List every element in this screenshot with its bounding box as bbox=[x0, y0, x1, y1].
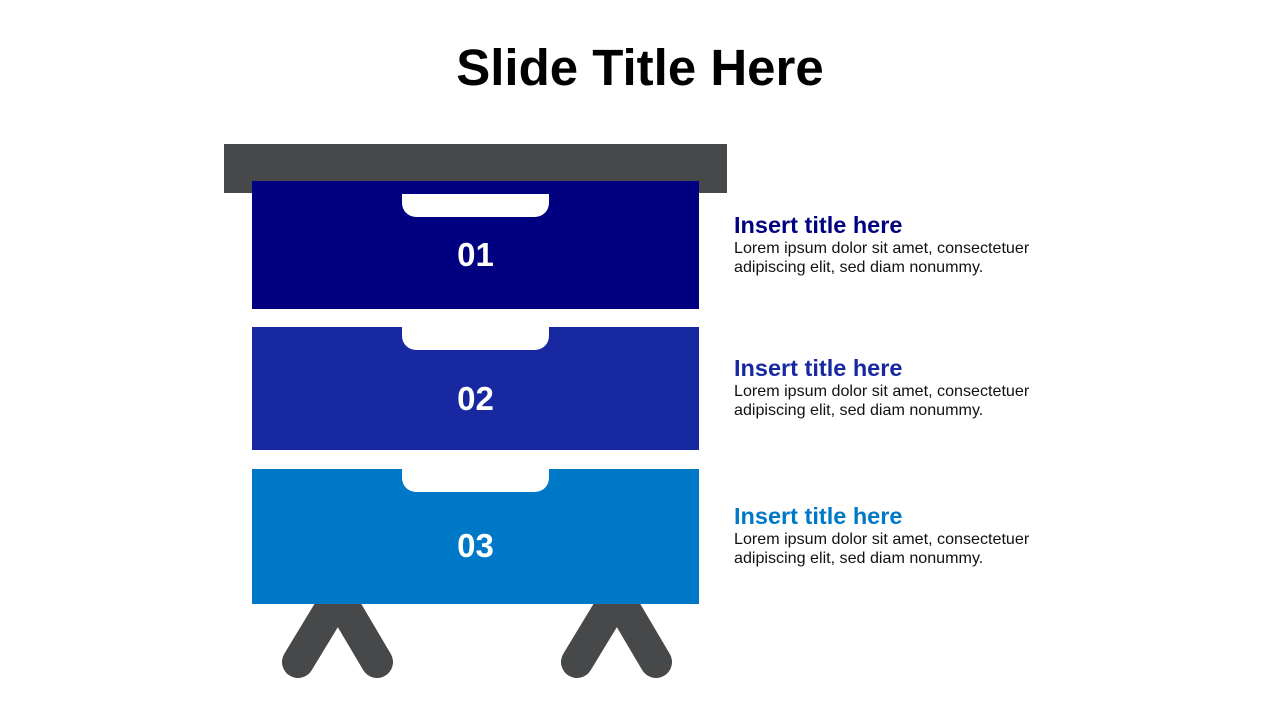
text 3: Lorem ipsum dolor sit amet, consectetuer bbox=[734, 530, 1029, 548]
drawer 03 bbox=[252, 469, 699, 604]
text 2 bbox=[734, 355, 1029, 419]
top bar bbox=[224, 144, 727, 193]
text 3 bbox=[734, 503, 1029, 567]
text 1 bbox=[734, 212, 1029, 276]
text 2: adipiscing elit, sed diam nonummy. bbox=[734, 401, 983, 419]
drawer 02 bbox=[252, 327, 699, 450]
text 3: Insert title here bbox=[734, 503, 902, 529]
drawer 02: 02 bbox=[457, 380, 494, 417]
drawer 01 bbox=[252, 181, 699, 309]
text 3: adipiscing elit, sed diam nonummy. bbox=[734, 549, 983, 567]
text 1: Insert title here bbox=[734, 212, 902, 238]
drawer 01: 01 bbox=[457, 236, 494, 273]
text 2: Lorem ipsum dolor sit amet, consectetuer bbox=[734, 382, 1029, 400]
text 2: Insert title here bbox=[734, 355, 902, 381]
text 1: Lorem ipsum dolor sit amet, consectetuer bbox=[734, 239, 1029, 257]
drawer 03: 03 bbox=[457, 527, 494, 564]
title: Slide Title Here bbox=[456, 39, 824, 96]
text 1: adipiscing elit, sed diam nonummy. bbox=[734, 258, 983, 276]
